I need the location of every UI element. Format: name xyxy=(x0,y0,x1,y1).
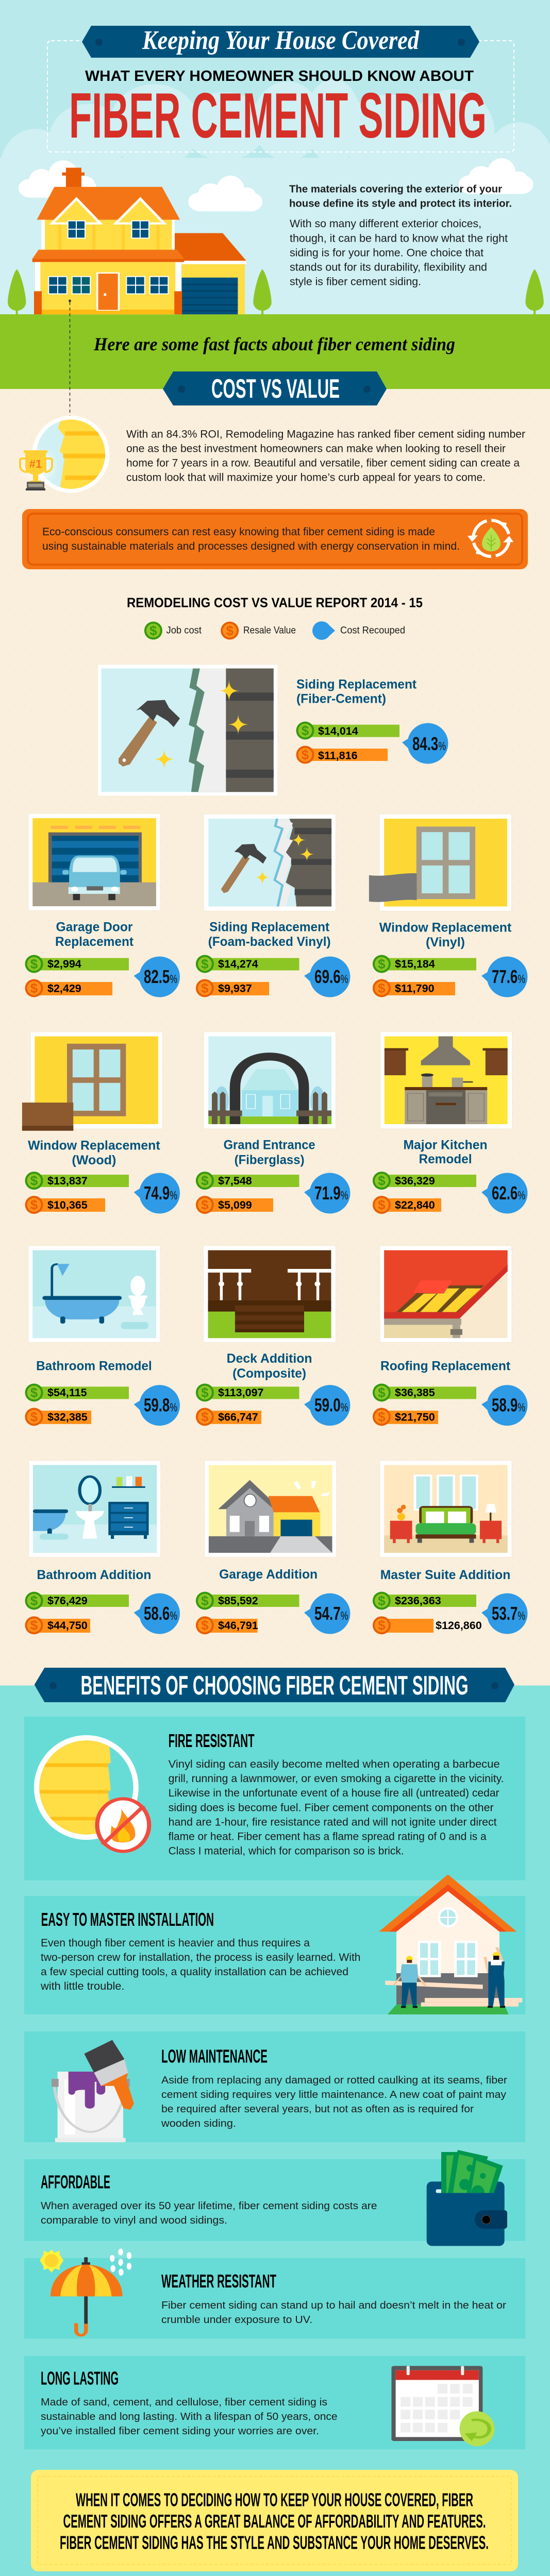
illustration xyxy=(28,814,160,910)
stats: $22,840 xyxy=(395,1199,435,1211)
upper walls xyxy=(41,218,175,251)
stats: $32,385 xyxy=(47,1411,88,1423)
icon: calendar xyxy=(391,2366,495,2446)
stats: 58.9% xyxy=(492,1394,525,1416)
body text: you’ve installed fiber cement siding your worries are over. xyxy=(41,2426,319,2437)
stats: $ xyxy=(302,747,309,762)
legend: Cost Recouped xyxy=(340,625,405,636)
icon: trophy xyxy=(18,446,59,490)
intro text xyxy=(289,183,512,288)
title: Window Replacement xyxy=(28,1138,160,1153)
stats xyxy=(25,1384,180,1426)
stats xyxy=(25,955,180,997)
stats: 59.8% xyxy=(144,1394,177,1416)
stats: $21,750 xyxy=(395,1411,435,1423)
eco callout xyxy=(22,509,528,569)
body text: hand are 1-hour, fire resistance rated and will not ignite under direct xyxy=(169,1817,497,1828)
stats: $ xyxy=(30,1197,38,1213)
intro text: With so many different exterior choices, xyxy=(290,218,481,230)
stats: $ xyxy=(30,1409,38,1425)
heading: LOW MAINTENANCE xyxy=(161,2046,268,2067)
title: Bathroom Remodel xyxy=(36,1359,152,1373)
stats xyxy=(373,1384,527,1426)
illustration xyxy=(204,1246,336,1342)
stats: 77.6% xyxy=(492,966,525,987)
body text: Aside from replacing any damaged or rotted caulking at its seams, fiber xyxy=(161,2075,507,2086)
stats: $236,363 xyxy=(395,1595,441,1607)
body text: comparable to vinyl and wood sidings. xyxy=(41,2215,227,2226)
stats: $85,592 xyxy=(218,1595,258,1607)
stats: $ xyxy=(30,1173,38,1189)
icon: siding circle with no-fire sign xyxy=(34,1735,149,1851)
stats: 71.9% xyxy=(314,1182,348,1204)
illustration xyxy=(380,1461,512,1557)
garage xyxy=(175,233,246,314)
panel: low maintenance xyxy=(24,2031,525,2142)
ROI text: custom look that will maximize your home’s curb appeal for years to come. xyxy=(126,472,486,484)
stats xyxy=(373,1592,527,1634)
icon: house with workers xyxy=(379,1874,522,2014)
panel: weather resistant xyxy=(24,2248,525,2338)
ROI text: one as the best investment homeowners can make when looking to resell their xyxy=(126,443,506,454)
card: window vinyl xyxy=(369,814,527,997)
stats: $9,937 xyxy=(218,982,252,994)
stats: $ xyxy=(201,1197,209,1213)
body text: sustainable and long lasting. With a lifespan of 50 years, once xyxy=(41,2411,338,2422)
stats: $36,385 xyxy=(395,1386,435,1399)
illustration xyxy=(28,1246,160,1342)
legend: $ xyxy=(149,623,157,638)
stats: $2,429 xyxy=(47,982,81,994)
title xyxy=(379,920,512,950)
card: roofing replacement xyxy=(373,1246,527,1426)
panel: affordable xyxy=(24,2150,525,2246)
body text xyxy=(161,2300,506,2326)
title: Grand Entrance xyxy=(224,1138,315,1152)
stats: $ xyxy=(378,1173,386,1189)
stats: $44,750 xyxy=(47,1619,88,1632)
stats: $14,274 xyxy=(218,958,258,970)
section banner: cost vs value: COST VS VALUE xyxy=(211,374,340,404)
subtitle: WHAT EVERY HOMEOWNER SHOULD KNOW ABOUT xyxy=(85,68,474,84)
intro text: The materials covering the exterior of your xyxy=(289,183,502,195)
body text: two-person crew for installation, the process is easily learned. With xyxy=(41,1952,361,1963)
body text: Made of sand, cement, and cellulose, fiber cement siding is xyxy=(41,2397,327,2408)
body text: a few special cutting tools, a quality installation can be achieved xyxy=(41,1966,348,1978)
stats: $46,791 xyxy=(218,1619,258,1632)
stats: $2,994 xyxy=(47,958,81,970)
icon: trophy: #1 xyxy=(29,457,42,470)
title: (Foam-backed Vinyl) xyxy=(208,935,331,949)
stats: $ xyxy=(30,1385,38,1400)
ground floor xyxy=(34,262,182,314)
title: Replacement xyxy=(55,935,134,949)
ROI text: With an 84.3% ROI, Remodeling Magazine has ranked fiber cement siding number xyxy=(126,429,525,440)
stats: $15,184 xyxy=(395,958,435,970)
illustration xyxy=(380,1032,512,1129)
title: Siding Replacement xyxy=(296,677,417,692)
illustration xyxy=(380,1246,512,1342)
stats: $66,747 xyxy=(218,1411,258,1423)
card: deck addition xyxy=(196,1246,350,1426)
body text: be required after several years, but not as often as is required for xyxy=(161,2104,474,2115)
stats xyxy=(196,1384,350,1426)
illustration xyxy=(369,814,511,911)
stats: 62.6% xyxy=(492,1182,525,1204)
icon: house xyxy=(32,168,246,314)
title xyxy=(28,1138,160,1167)
stats: $ xyxy=(201,956,209,972)
stats: $ xyxy=(30,956,38,972)
ROI text xyxy=(126,429,525,484)
stats xyxy=(373,955,527,997)
body text: Class I material, which for comparison so is brick. xyxy=(169,1845,404,1857)
stats: $ xyxy=(30,1618,38,1633)
stats: 82.5% xyxy=(144,966,177,987)
legend xyxy=(144,621,405,640)
report heading: REMODELING COST VS VALUE REPORT 2014 - 15 xyxy=(127,595,423,611)
card: bathroom remodel xyxy=(25,1246,180,1426)
illustration xyxy=(29,1461,161,1557)
cream section background xyxy=(0,389,550,1686)
main roof xyxy=(37,187,180,220)
title xyxy=(55,920,134,949)
stats xyxy=(296,721,448,764)
eco callout: using sustainable materials and processes designed with energy conservation in mind. xyxy=(42,540,460,552)
body text: cement siding requires very little maintenance. A new coat of paint may xyxy=(161,2089,506,2100)
dashed title frame xyxy=(47,41,514,152)
card: garage addition xyxy=(196,1461,350,1634)
stats xyxy=(196,1592,350,1634)
worker right xyxy=(484,1947,505,2008)
eco callout: Eco-conscious consumers can rest easy knowing that fiber cement siding is made xyxy=(42,526,435,538)
card: window wood xyxy=(22,1032,180,1214)
stats: $ xyxy=(378,1593,386,1608)
body text: Fiber cement siding can stand up to hail and doesn’t melt in the heat or xyxy=(161,2300,506,2311)
body text: siding does is become fuel. Fiber cement components on the other xyxy=(169,1802,494,1814)
title xyxy=(403,1138,488,1166)
body text: Likewise in the unfortunate event of a house fire all (untreated) cedar xyxy=(169,1787,499,1799)
title xyxy=(208,920,331,949)
icon: siding circle xyxy=(32,416,112,493)
stats: $11,790 xyxy=(395,982,435,994)
title: Roofing Replacement xyxy=(380,1359,511,1373)
panel: easy to master installation xyxy=(24,1874,525,2014)
body text: crumble under exposure to UV. xyxy=(161,2314,312,2326)
stats: $ xyxy=(201,1409,209,1425)
body text xyxy=(169,1758,504,1857)
title: Deck Addition xyxy=(227,1351,312,1366)
card: bathroom addition xyxy=(25,1461,180,1634)
title: Garage Door xyxy=(56,920,133,934)
body text: grill, running a lawnmower, or even smoking a cigarette in the vicinity. xyxy=(169,1773,504,1785)
intro text: stands out for its durability, flexibility and xyxy=(290,262,487,273)
title: (Vinyl) xyxy=(426,935,465,950)
body text: wooden siding. xyxy=(161,2118,236,2129)
panel: long lasting xyxy=(24,2356,525,2449)
title: Siding Replacement xyxy=(209,920,330,934)
body text: When averaged over its 50 year lifetime, fiber cement siding costs are xyxy=(41,2200,377,2212)
title banner: Keeping Your House Covered xyxy=(142,26,420,55)
gables xyxy=(52,199,164,224)
conclusion callout xyxy=(31,2470,518,2571)
title xyxy=(224,1138,315,1167)
stats: $10,365 xyxy=(47,1199,88,1211)
benefits section background xyxy=(0,1686,550,2576)
title: Bathroom Addition xyxy=(37,1568,151,1582)
stats: $76,429 xyxy=(47,1595,88,1607)
stats: $7,548 xyxy=(218,1175,252,1187)
intro text: though, it can be hard to know what the right xyxy=(290,232,508,244)
stats: 58.6% xyxy=(144,1603,177,1624)
heading: LONG LASTING xyxy=(41,2367,119,2388)
stats: $126,860 xyxy=(436,1619,482,1632)
green lawn band xyxy=(0,314,550,389)
body text: Even though fiber cement is heavier and thus requires a xyxy=(41,1937,310,1949)
title: Master Suite Addition xyxy=(380,1568,510,1582)
stats: $13,837 xyxy=(47,1175,88,1187)
feature card: siding replacement fiber-cement xyxy=(97,665,448,796)
title: (Wood) xyxy=(72,1153,116,1167)
stats: 69.6% xyxy=(314,966,348,987)
icon: paint can and brush xyxy=(52,2040,134,2142)
title xyxy=(296,677,417,706)
body text xyxy=(41,2397,338,2437)
title: Window Replacement xyxy=(379,920,512,935)
stats: 59.0% xyxy=(314,1394,348,1416)
legend: Job cost xyxy=(166,625,202,636)
stats: $ xyxy=(201,980,209,996)
title: Garage Addition xyxy=(219,1567,318,1582)
stats xyxy=(25,1172,180,1214)
legend: Resale Value xyxy=(243,625,296,636)
white clouds xyxy=(19,158,533,211)
stats: $ xyxy=(378,1385,386,1400)
background clouds xyxy=(0,79,550,315)
stats: 74.9% xyxy=(144,1182,177,1204)
legend: $ xyxy=(226,623,234,638)
stats: $ xyxy=(201,1385,209,1400)
upper windows xyxy=(68,221,149,239)
stats xyxy=(196,955,350,997)
stats: $36,329 xyxy=(395,1175,435,1187)
body text: with little trouble. xyxy=(40,1980,125,1992)
stats xyxy=(196,1172,350,1214)
title: (Composite) xyxy=(232,1366,306,1381)
ROI text: home for 7 years in a row. Beautiful and versatile, fiber cement siding can create a xyxy=(126,457,520,469)
stats: $5,099 xyxy=(218,1199,252,1211)
body text: Vinyl siding can easily become melted when operating a barbecue xyxy=(169,1758,500,1770)
heading: WEATHER RESISTANT xyxy=(161,2270,276,2292)
heading: FIRE RESISTANT xyxy=(169,1730,255,1751)
body text: flame or heat. Fiber cement has a flame spread rating of 0 and is a xyxy=(169,1831,487,1842)
stats: $11,816 xyxy=(318,749,358,761)
title: (Fiber-Cement) xyxy=(296,691,386,706)
stats: 54.7% xyxy=(314,1603,348,1624)
stats: $ xyxy=(302,723,309,738)
stats: $ xyxy=(378,1618,386,1633)
card: siding foam-backed vinyl xyxy=(196,814,350,997)
intro text: siding is for your home. One choice that xyxy=(290,247,484,259)
stats: $ xyxy=(378,980,386,996)
title xyxy=(227,1351,312,1381)
stats: $14,014 xyxy=(318,725,358,737)
stats: $ xyxy=(201,1173,209,1189)
section banner: cost vs value xyxy=(163,371,387,405)
stats: $54,115 xyxy=(47,1386,87,1399)
stats xyxy=(25,1592,180,1634)
card: grand entrance xyxy=(196,1032,350,1214)
heading: AFFORDABLE xyxy=(41,2171,110,2192)
stats: 84.3% xyxy=(412,733,446,754)
panel: fire resistant xyxy=(24,1717,525,1880)
stats: $ xyxy=(30,1593,38,1608)
body text xyxy=(40,1937,360,1992)
body text xyxy=(41,2200,377,2226)
stats: $ xyxy=(378,1409,386,1425)
intro text: style is fiber cement siding. xyxy=(290,276,421,288)
fast facts script heading: Here are some fast facts about fiber cement siding xyxy=(93,334,455,354)
intro text: house define its style and protect its interior. xyxy=(289,198,512,209)
illustration xyxy=(205,1461,337,1557)
stats: $ xyxy=(201,1593,209,1608)
worker left xyxy=(393,1956,426,2008)
icon: umbrella sun and rain xyxy=(40,2248,131,2335)
stats: $ xyxy=(378,1197,386,1213)
chimney xyxy=(62,168,85,189)
icon: wallet with cash xyxy=(427,2150,507,2246)
dashed connector xyxy=(69,300,71,416)
stats: $113,097 xyxy=(218,1386,264,1399)
heading: EASY TO MASTER INSTALLATION xyxy=(41,1909,214,1930)
illustration xyxy=(22,1032,162,1131)
stats: 53.7% xyxy=(492,1603,525,1624)
stats: $ xyxy=(378,956,386,972)
illustration xyxy=(204,814,336,911)
stats: $ xyxy=(201,1618,209,1633)
sky background xyxy=(0,0,550,315)
trees xyxy=(8,269,544,315)
stats xyxy=(373,1172,527,1214)
porch roof xyxy=(32,250,184,262)
title: Remodel xyxy=(419,1152,472,1166)
card: major kitchen xyxy=(373,1032,527,1214)
stats: $ xyxy=(30,980,38,996)
image frame xyxy=(97,665,278,796)
body text xyxy=(161,2075,507,2129)
title: Major Kitchen xyxy=(403,1138,488,1152)
lower windows xyxy=(48,276,169,294)
card: master suite xyxy=(373,1461,527,1634)
illustration xyxy=(204,1032,336,1129)
title: (Fiberglass) xyxy=(235,1153,305,1167)
card: garage door xyxy=(25,814,180,997)
icon: recycle leaf xyxy=(468,520,513,556)
